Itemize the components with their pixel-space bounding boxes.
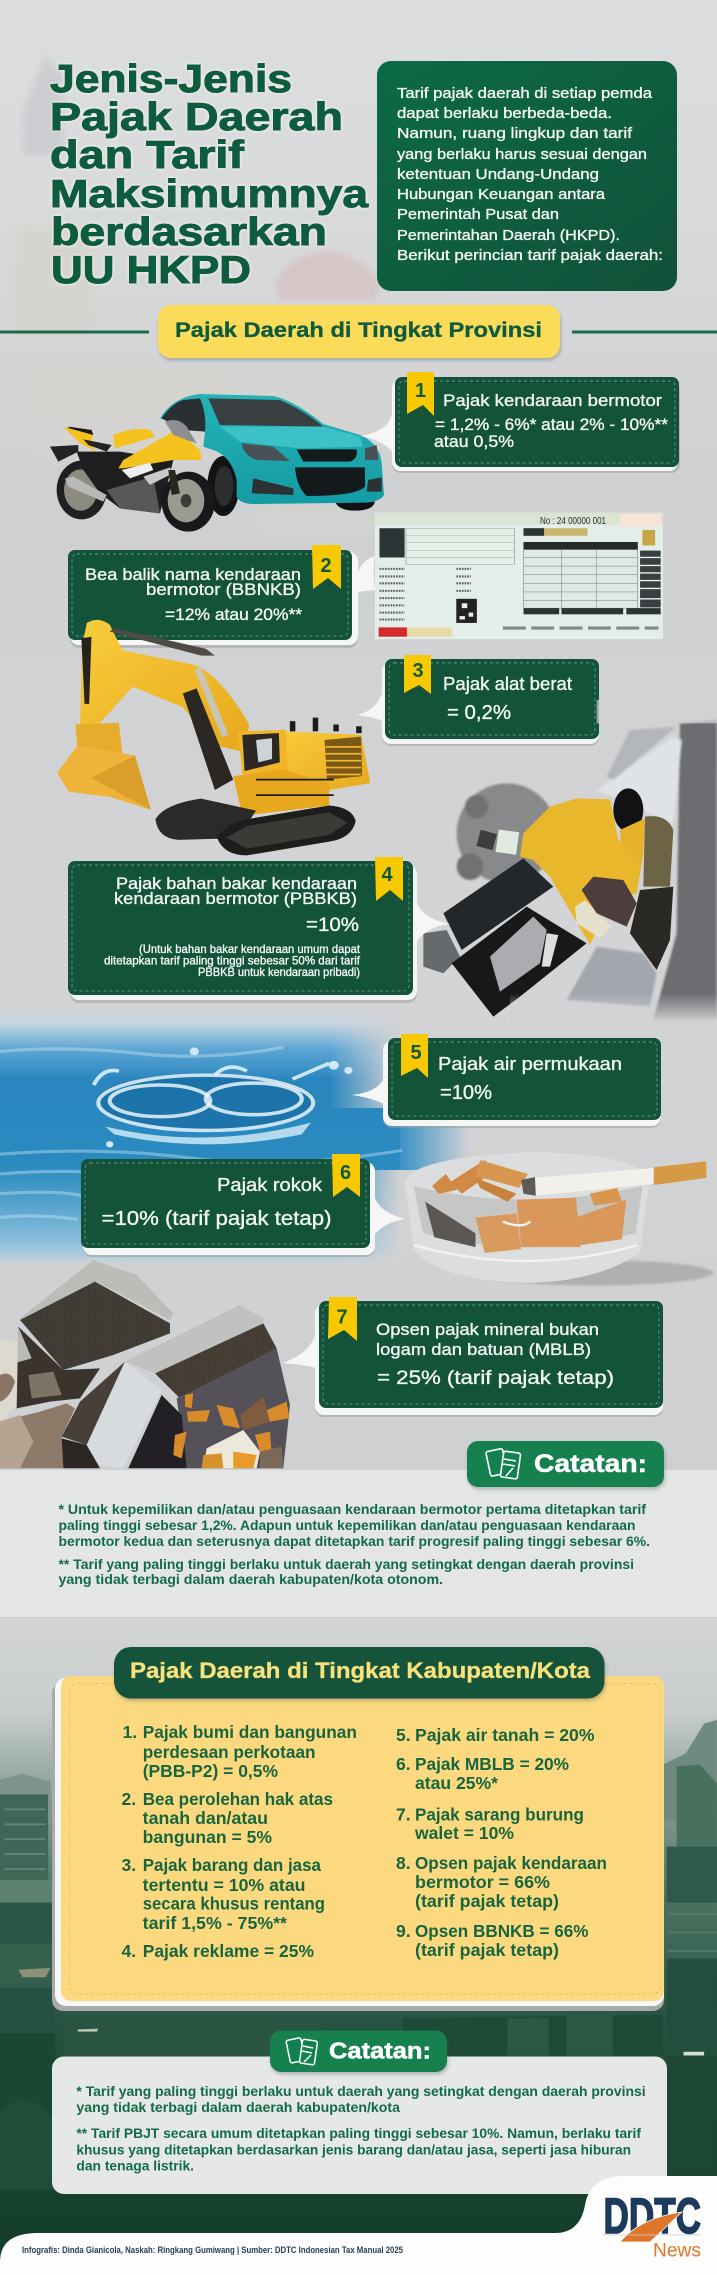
panel: catatan kabupaten/kota [52, 2056, 667, 2194]
text 3: Pajak alat berat [443, 673, 572, 694]
list: right column: Pajak MBLB = 20% [415, 1754, 569, 1774]
text 5: Pajak air permukaan [438, 1053, 622, 1074]
icon: notes [486, 1448, 521, 1479]
footer bar [0, 2176, 717, 2275]
list: right column: Pajak air tanah = 20% [415, 1725, 595, 1745]
logo: DDTC News [603, 2188, 701, 2262]
text 2 [85, 565, 302, 624]
text 4: PBBKB untuk kendaraan pribadi) [198, 965, 360, 979]
text 7: Opsen pajak mineral bukan [376, 1320, 599, 1339]
list: right column: 8. [396, 1853, 411, 1873]
text 4: =10% [306, 915, 359, 936]
notes text: * Untuk kepemilikan dan/atau penguasaan kendaraan bermotor pertama ditetapkan tarif [58, 1501, 646, 1517]
callout 5: pajak air permukaan [352, 1034, 661, 1128]
text 7 [376, 1320, 614, 1389]
list: right column: 9. [396, 1921, 411, 1941]
list: left column: bangunan = 5% [143, 1827, 272, 1847]
list: right column: (tarif pajak tetap) [415, 1891, 559, 1911]
document number: No : 24 00000 001 [540, 516, 606, 527]
badge 2: 2 [320, 555, 332, 577]
badge 2 [312, 545, 341, 589]
list: left column: 4. [122, 1941, 136, 1961]
notes text [76, 2083, 646, 2174]
callout 6: pajak rokok [81, 1154, 405, 1257]
button: catatan provinsi [467, 1441, 664, 1487]
image: ashtray with cigarette [405, 1152, 713, 1285]
intro text [397, 85, 663, 264]
text 4: ditetapkan tarif paling tinggi sebesar 50% dari tarif [104, 954, 361, 968]
text 4: Pajak bahan bakar kendaraan [116, 874, 357, 893]
button: catatan kabupaten/kota [270, 2031, 447, 2072]
badge 7 [328, 1297, 357, 1341]
intro text: yang berlaku harus sesuai dengan [397, 146, 647, 163]
list: left column: Pajak barang dan jasa [143, 1855, 321, 1875]
list: right column: (tarif pajak tetap) [415, 1940, 559, 1960]
notes text: bermotor kedua dan seterusnya dapat ditetapkan tarif progresif paling tinggi sebesar 6%. [58, 1533, 650, 1549]
callout 7: opsen MBLB [283, 1297, 663, 1417]
credit line: Infografis: Dinda Gianicola, Naskah: Ringkang Gumiwang | Sumber: DDTC Indonesian Tax Manual 2025 [22, 2245, 403, 2255]
intro text: Pemerintahan Daerah (HKPD). [397, 227, 620, 244]
list: left column: tanah dan/atau [143, 1808, 268, 1828]
list: left column: tertentu = 10% atau [143, 1875, 306, 1895]
button: catatan provinsi: Catatan: [534, 1450, 647, 1478]
image: motorcycle and car [50, 394, 384, 532]
text 2: Bea balik nama kendaraan [85, 565, 301, 584]
list: right column: 5. [396, 1725, 411, 1745]
list: right column: 7. [396, 1804, 411, 1824]
text 1 [434, 391, 668, 451]
list: right column: walet = 10% [414, 1823, 514, 1843]
heading: provinsi [0, 305, 717, 358]
intro text: Namun, ruang lingkup dan tarif [397, 125, 633, 142]
badge 4: 4 [381, 864, 393, 886]
text 7: logam dan batuan (MBLB) [376, 1340, 591, 1359]
list: left column [122, 1722, 357, 1961]
title: Maksimumnya [50, 173, 368, 216]
list: right column: Opsen BBNKB = 66% [415, 1921, 589, 1941]
background: faded patch behind vehicles [40, 385, 400, 535]
text 3: = 0,2% [447, 702, 511, 724]
list: right column [396, 1725, 607, 1960]
title: UU HKPD [51, 249, 251, 292]
text 5 [438, 1053, 622, 1104]
icon: notes [286, 2038, 318, 2065]
background: light grey page [0, 0, 717, 1620]
text 5: =10% [440, 1082, 492, 1104]
notes text: dan tenaga listrik. [76, 2158, 194, 2174]
notes text: ** Tarif yang paling tinggi berlaku untuk daerah yang setingkat dengan daerah provinsi [58, 1556, 634, 1572]
image: fuel nozzle [423, 700, 717, 1023]
text 1: Pajak kendaraan bermotor [443, 391, 662, 410]
badge 1 [407, 372, 434, 416]
list: left column: tarif 1,5% - 75%** [143, 1913, 287, 1933]
notes text: yang tidak terbagi dalam daerah kabupaten/kota otonom. [58, 1571, 443, 1587]
text 7: = 25% (tarif pajak tetap) [377, 1367, 614, 1389]
list: left column: Pajak bumi dan bangunan [143, 1722, 357, 1742]
list: left column: Bea perolehan hak atas [143, 1789, 333, 1809]
notes text: * Tarif yang paling tinggi berlaku untuk daerah yang setingkat dengan daerah provinsi [76, 2083, 646, 2099]
notes text: khusus yang ditetapkan berdasarkan jenis barang dan/atau jasa, seperti jasa hiburan [76, 2142, 631, 2158]
list: right column: 6. [396, 1754, 411, 1774]
title [50, 58, 368, 292]
list: right column: Pajak sarang burung [415, 1804, 584, 1824]
motorcycle [50, 420, 215, 532]
heading: kabupaten/kota: Pajak Daerah di Tingkat Kabupaten/Kota [130, 1658, 591, 1683]
callout 2: BBNKB [68, 545, 375, 648]
text 4: kendaraan bermotor (PBBKB) [114, 889, 357, 908]
intro text: Berikut perincian tarif pajak daerah: [397, 247, 663, 264]
text 6 [102, 1174, 332, 1230]
list: right column: bermotor = 66% [415, 1872, 550, 1892]
callout 4: PBBKB [68, 857, 450, 1003]
image: water splash [0, 1008, 470, 1264]
button: catatan kabupaten/kota: Catatan: [329, 2038, 431, 2064]
text 2: bermotor (BBNKB) [146, 580, 301, 599]
list: left column: 2. [122, 1789, 136, 1809]
badge 1: 1 [415, 380, 426, 402]
text 4: (Untuk bahan bakar kendaraan umum dapat [139, 942, 361, 956]
image: mineral rocks [0, 1260, 290, 1468]
panel: catatan provinsi [0, 1470, 717, 1617]
notes text: ** Tarif PBJT secara umum ditetapkan paling tinggi sebesar 10%. Namun, berlaku tarif [76, 2125, 641, 2141]
image: STNK document [375, 513, 663, 639]
list: left column: 3. [122, 1855, 136, 1875]
heading: kabupaten/kota [114, 1647, 604, 1698]
text 3 [443, 673, 572, 724]
notes text: paling tinggi sebesar 1,2%. Adapun untuk kepemilikan dan/atau penguasaan kendaraan [58, 1517, 636, 1533]
badge 3 [404, 655, 431, 694]
list: right column: Opsen pajak kendaraan [415, 1853, 607, 1873]
intro text: Pemerintah Pusat dan [397, 206, 559, 223]
list: left column: perdesaan perkotaan [143, 1742, 316, 1762]
badge 5 [401, 1034, 428, 1078]
text 6: Pajak rokok [217, 1174, 323, 1195]
car [160, 394, 384, 516]
badge 5: 5 [410, 1042, 422, 1064]
badge 6: 6 [340, 1162, 351, 1184]
badge 4 [375, 857, 403, 901]
logo: DDTC News: News [653, 2241, 701, 2262]
notes text [58, 1501, 650, 1587]
background: green city [0, 1618, 717, 2275]
badge 6 [332, 1154, 360, 1197]
badge 3: 3 [412, 660, 424, 682]
list: left column: 1. [122, 1722, 137, 1742]
intro text: dapat berlaku berbeda-beda. [397, 105, 612, 122]
intro text: ketentuan Undang-Undang [397, 166, 599, 183]
panel: intro [377, 61, 677, 291]
intro text: Tarif pajak daerah di setiap pemda [397, 85, 653, 102]
title: dan Tarif [50, 134, 245, 177]
heading: provinsi: Pajak Daerah di Tingkat Provinsi [175, 319, 542, 342]
image: excavator [57, 620, 370, 855]
list: left column: Pajak reklame = 25% [143, 1941, 314, 1961]
callout 3: pajak alat berat [357, 655, 599, 746]
intro text: Hubungan Keuangan antara [397, 186, 606, 203]
list: left column: (PBB-P2) = 0,5% [143, 1761, 278, 1781]
background: faded coins, house and toy car [14, 55, 380, 417]
notes text: yang tidak terbagi dalam daerah kabupaten/kota [76, 2099, 400, 2115]
text 2: =12% atau 20%** [165, 605, 302, 624]
title: berdasarkan [51, 211, 327, 254]
list: left column: secara khusus rentang [143, 1894, 325, 1914]
list: right column: atau 25%* [415, 1773, 498, 1793]
text 1: = 1,2% - 6%* atau 2% - 10%** [435, 415, 668, 434]
text 6: =10% (tarif pajak tetap) [102, 1208, 332, 1230]
panel: pajak daerah kabupaten/kota [52, 1676, 664, 2011]
callout 1: pajak kendaraan bermotor [361, 372, 680, 473]
badge 7: 7 [336, 1306, 348, 1328]
title: Pajak Daerah [50, 96, 343, 139]
text 4 [104, 874, 361, 979]
text 1: atau 0,5% [434, 432, 514, 451]
title: Jenis-Jenis [50, 58, 292, 101]
